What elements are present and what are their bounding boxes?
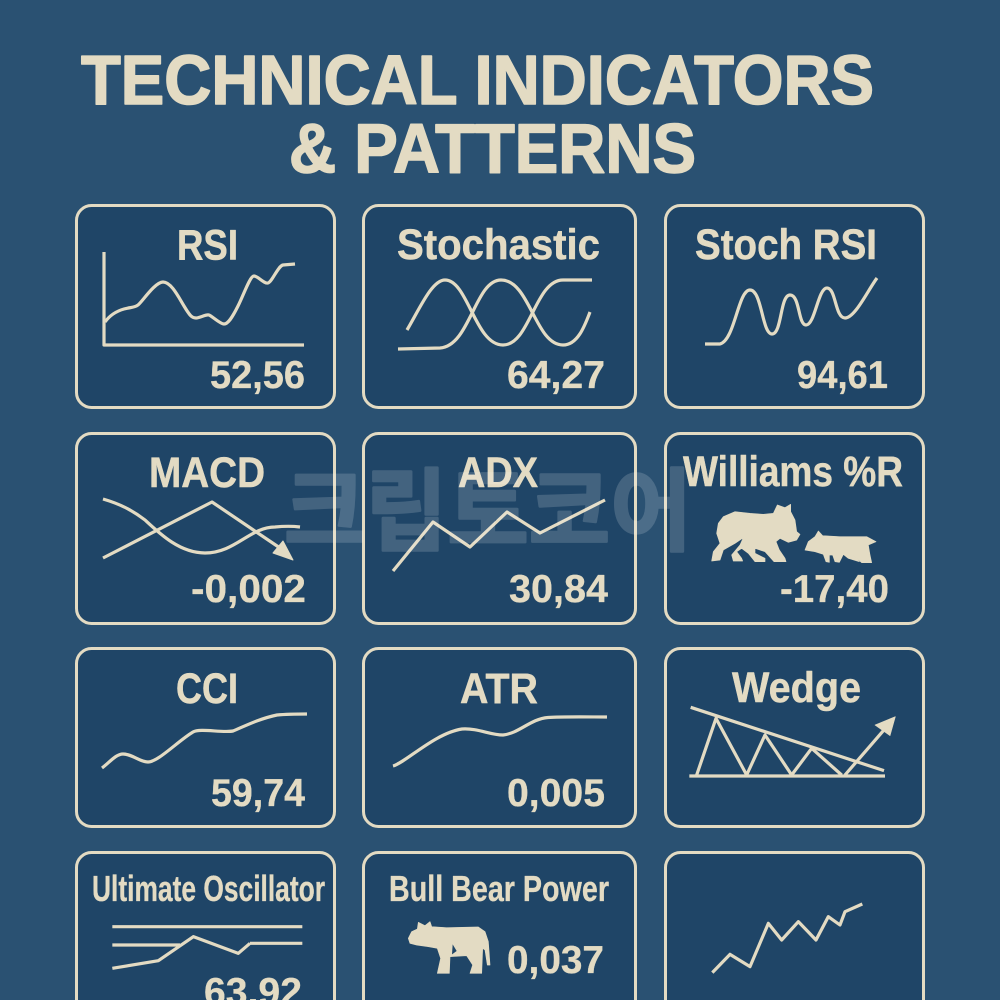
panel: RSI: 52,56 xyxy=(210,354,305,397)
panel: Williams %R xyxy=(666,434,924,624)
chart: Ultimate Oscillator lines xyxy=(112,927,302,968)
title: TECHNICAL INDICATORS xyxy=(81,41,874,119)
title: & PATTERNS xyxy=(289,110,696,188)
title xyxy=(81,41,874,188)
panel: untitled trend chart xyxy=(666,852,924,1000)
panel: Bull Bear Power: Bull Bear Power xyxy=(389,868,609,909)
chart: ATR line xyxy=(393,717,607,766)
panel: MACD: MACD xyxy=(149,449,265,497)
panel: Stochastic: Stochastic xyxy=(397,221,600,269)
chart: wedge pattern with arrow xyxy=(689,707,895,776)
panel: Williams %R: Williams %R xyxy=(683,448,903,496)
panel: Williams %R: -17,40 xyxy=(780,568,889,611)
panel: ADX xyxy=(364,434,636,624)
chart: Stochastic crossing curves xyxy=(398,280,592,349)
panel: Stoch RSI: 94,61 xyxy=(797,354,888,397)
panel: Stoch RSI: Stoch RSI xyxy=(695,221,877,269)
panel: Stochastic: 64,27 xyxy=(507,354,605,397)
panel: Stoch RSI xyxy=(666,206,924,408)
panel: ADX: 30,84 xyxy=(509,568,608,611)
panel: Bull Bear Power: 0,037 xyxy=(507,939,604,982)
icon: bears xyxy=(712,504,876,563)
panel: ATR: ATR xyxy=(460,665,538,713)
panel: CCI: CCI xyxy=(176,665,238,713)
panel: Ultimate Oscillator: Ultimate Oscillator xyxy=(92,868,325,909)
panel: ADX: ADX xyxy=(458,449,538,497)
panel: Stochastic xyxy=(364,206,636,408)
panel: Bull Bear Power xyxy=(364,852,636,1000)
panel: Wedge xyxy=(666,648,924,826)
chart: ADX line xyxy=(393,500,605,571)
panel: ATR xyxy=(364,648,636,826)
panel: ATR: 0,005 xyxy=(507,772,605,815)
panel: RSI xyxy=(76,206,334,408)
panel: Ultimate Oscillator xyxy=(76,852,334,1000)
panel: RSI: RSI xyxy=(177,222,238,270)
chart: MACD crossing lines with arrow xyxy=(103,499,300,560)
chart: rising zigzag line xyxy=(712,904,862,973)
chart: CCI line xyxy=(102,714,307,768)
panel: MACD xyxy=(76,434,334,624)
chart: Stoch RSI line xyxy=(705,278,877,344)
watermark: 크립토코어 xyxy=(284,463,692,563)
chart: RSI line xyxy=(104,252,304,345)
panel: CCI xyxy=(76,648,334,826)
panel: MACD: -0,002 xyxy=(191,568,306,611)
panel: Wedge: Wedge xyxy=(732,664,861,712)
icon: bull xyxy=(408,922,490,973)
panel: CCI: 59,74 xyxy=(211,772,305,815)
